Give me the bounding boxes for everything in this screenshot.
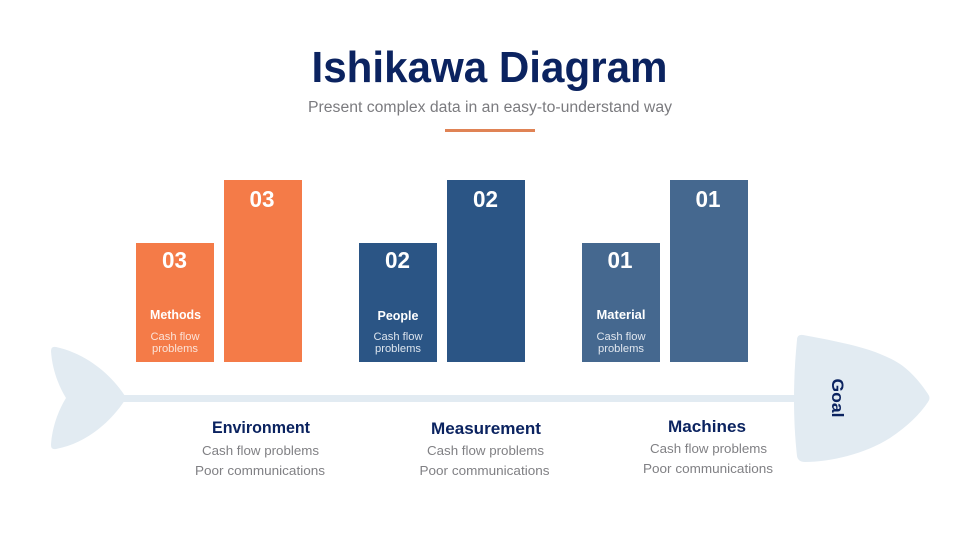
goal label: Goal [828,378,846,418]
fish tail [51,347,125,449]
short bar: material: problems [598,343,644,355]
text block: machines: Machines [668,417,746,436]
text block: environment: Cash flow problems [202,443,320,458]
short bar: people: Cash flow [374,331,423,343]
group: people [359,180,525,362]
short bar: people: problems [375,343,421,355]
short bar: methods [136,243,214,362]
text block: measurement: Cash flow problems [427,443,545,458]
tall bar: number 02: 02 [473,186,498,212]
text block: machines: Poor communications [643,461,774,476]
fish spine [122,395,798,402]
short bar: material: Cash flow [596,331,646,343]
short bar: people: 02 [385,247,410,273]
tall bar: number 01 [670,180,748,362]
title underline [445,129,535,132]
short bar: material: 01 [608,247,633,273]
tall bar: number 03 [224,180,302,362]
text block: measurement [420,419,550,478]
short bar: people: People [378,309,419,323]
short bar: people [359,243,437,362]
fish head [794,335,930,462]
tall bar: number 02 [447,180,525,362]
title: Ishikawa Diagram [312,43,668,92]
text block: environment: Environment [212,418,310,437]
text block: environment: Poor communications [195,463,326,478]
short bar: material [582,243,660,362]
short bar: methods: 03 [162,247,187,273]
short bar: methods: Methods [150,308,201,322]
text block: machines [643,417,774,476]
subtitle: Present complex data in an easy-to-understand way [308,99,672,116]
group: methods [136,180,302,362]
short bar: methods: Cash flow [150,331,200,343]
short bar: methods: problems [152,343,198,355]
text block: measurement: Poor communications [420,463,550,478]
fish skeleton [51,335,930,462]
text block: measurement: Measurement [431,419,541,438]
tall bar: number 03: 03 [250,186,274,212]
text block: machines: Cash flow problems [650,441,768,456]
short bar: material: Material [596,308,646,322]
tall bar: number 01: 01 [696,186,721,212]
group: material [582,180,748,362]
text block: environment [195,418,326,478]
